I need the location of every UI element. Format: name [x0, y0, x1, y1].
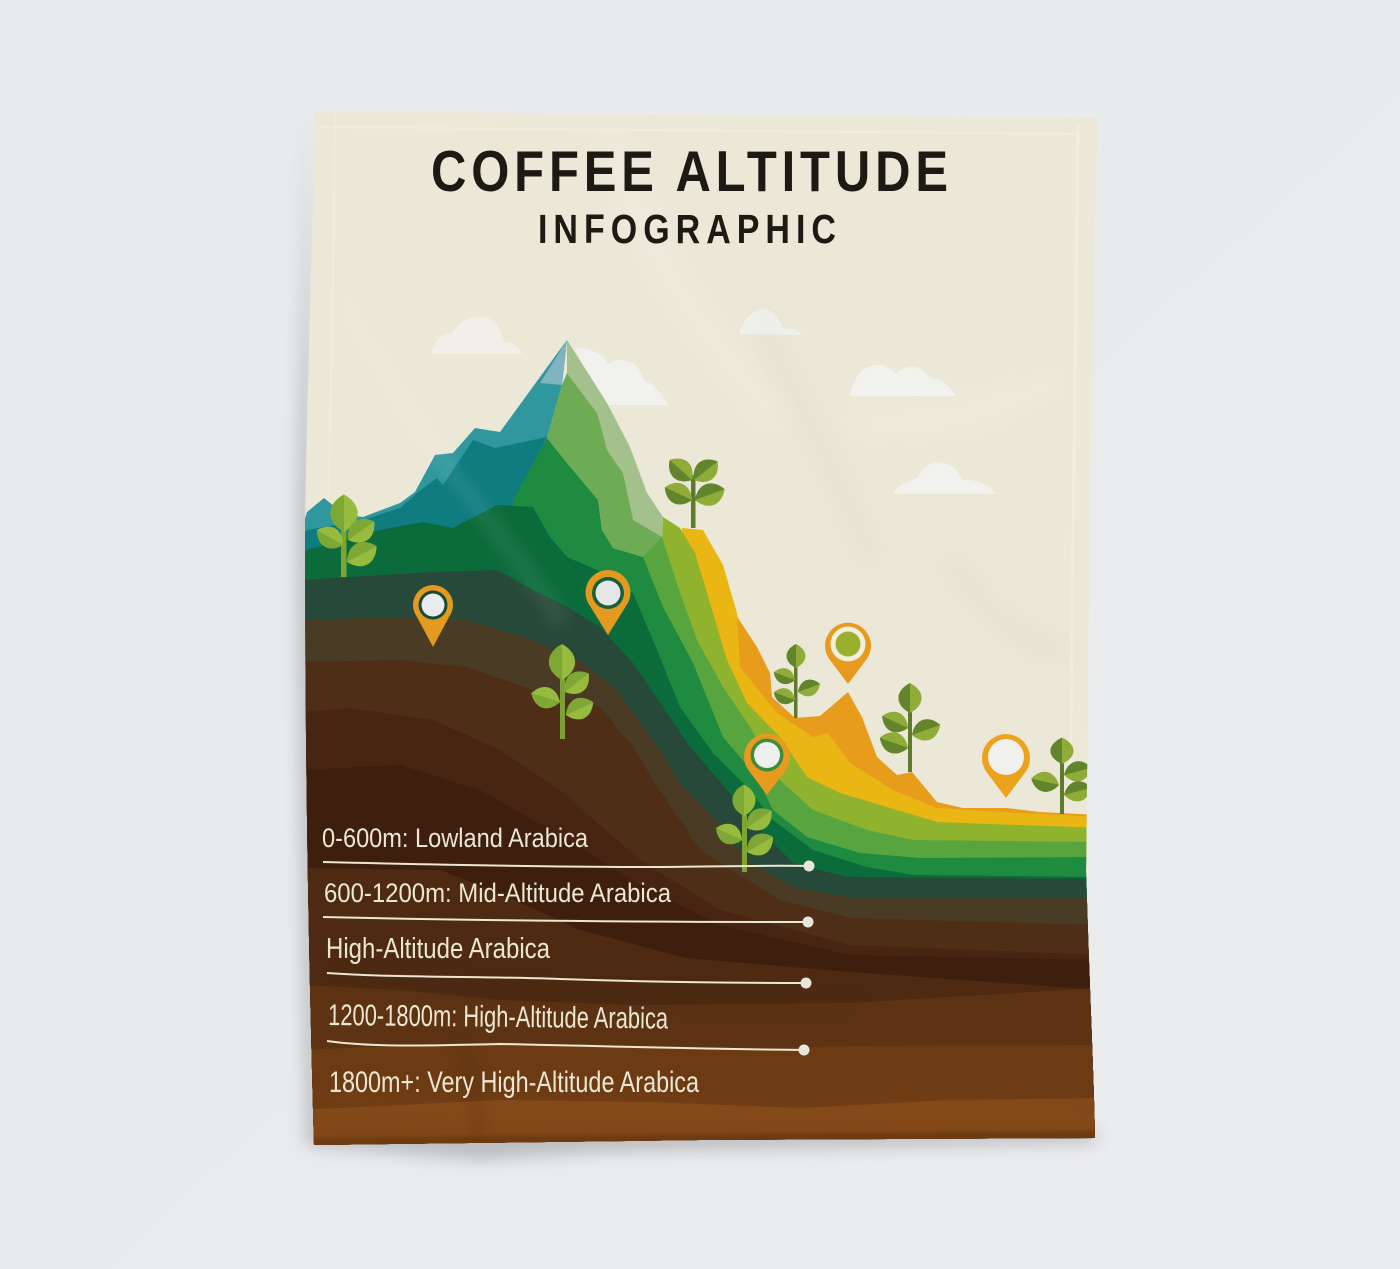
- snow patch: [562, 384, 563, 385]
- plant: right slope: [876, 683, 944, 772]
- orange brown layer: [312, 1042, 1094, 1110]
- orange band: [737, 616, 1090, 976]
- dark brown layer 1: [306, 708, 1095, 1126]
- green layer: [512, 438, 1094, 1071]
- teal mountain base: [300, 340, 567, 600]
- bottom edge shading: [314, 1130, 1095, 1145]
- legend row: high-altitude: High-Altitude Arabica: [326, 933, 551, 965]
- plant: near orange peak: [771, 644, 823, 718]
- legend row: 0-600m: 0-600m: Lowland Arabica: [322, 823, 589, 853]
- mid green band: [642, 537, 1088, 936]
- legend row: 600-1200m: [323, 878, 814, 928]
- plant: centre: [528, 644, 598, 739]
- dark green layer: [300, 505, 1100, 1200]
- plant: lower slope: [712, 784, 778, 872]
- plant: right edge: [1031, 738, 1088, 814]
- panel: blanket poster: [305, 111, 1098, 1145]
- altitude legend: [322, 823, 814, 1099]
- legend row: 1200-1800m: 1200-1800m: High-Altitude Arabica: [328, 999, 668, 1036]
- pin 3: [825, 623, 871, 684]
- charcoal green layer: [305, 570, 1094, 1102]
- warm brown layer: [310, 986, 1094, 1107]
- cloud 4: [850, 365, 956, 396]
- teal dark facet: [305, 437, 547, 550]
- pale green ridge: [567, 340, 663, 537]
- pin 5: [982, 734, 1030, 798]
- title: [431, 140, 948, 252]
- dark brown layer 2: [306, 765, 1095, 1144]
- brown layer: [305, 660, 1095, 1126]
- title line 1: COFFEE ALTITUDE: [431, 140, 948, 204]
- legend row: 1800m+: 1800m+: Very High-Altitude Arabica: [329, 1066, 699, 1099]
- pin 1: [413, 585, 453, 647]
- fabric folds: [329, 454, 1086, 1144]
- legend row: high-altitude: [326, 933, 812, 988]
- cloud 1: [432, 317, 522, 354]
- legend row: 600-1200m: 600-1200m: Mid-Altitude Arabica: [324, 878, 672, 908]
- pin 4: [744, 734, 790, 795]
- bottom ochre layer: [313, 1098, 1095, 1145]
- clouds: [432, 309, 996, 494]
- mid brown layer: [308, 868, 1095, 1120]
- legend row: 0-600m: [322, 823, 814, 872]
- teal peak tip: [540, 340, 567, 385]
- olive brown layer: [305, 617, 1095, 1120]
- light green slope: [547, 373, 662, 557]
- pin 2: [586, 570, 631, 635]
- title line 2: INFOGRAPHIC: [538, 206, 836, 252]
- cloud 3: [739, 309, 802, 335]
- blanket hem: [320, 111, 1080, 800]
- cloud 2: [575, 348, 668, 405]
- plant: upper slope: [660, 452, 728, 528]
- blanket shadow: [297, 120, 1095, 1160]
- panel background: [305, 111, 1098, 814]
- lime band: [662, 517, 1090, 976]
- yellow band: [682, 528, 1090, 976]
- plant: left edge: [312, 494, 382, 577]
- cloud 5: [893, 462, 996, 494]
- legend rule 4: [327, 1041, 810, 1056]
